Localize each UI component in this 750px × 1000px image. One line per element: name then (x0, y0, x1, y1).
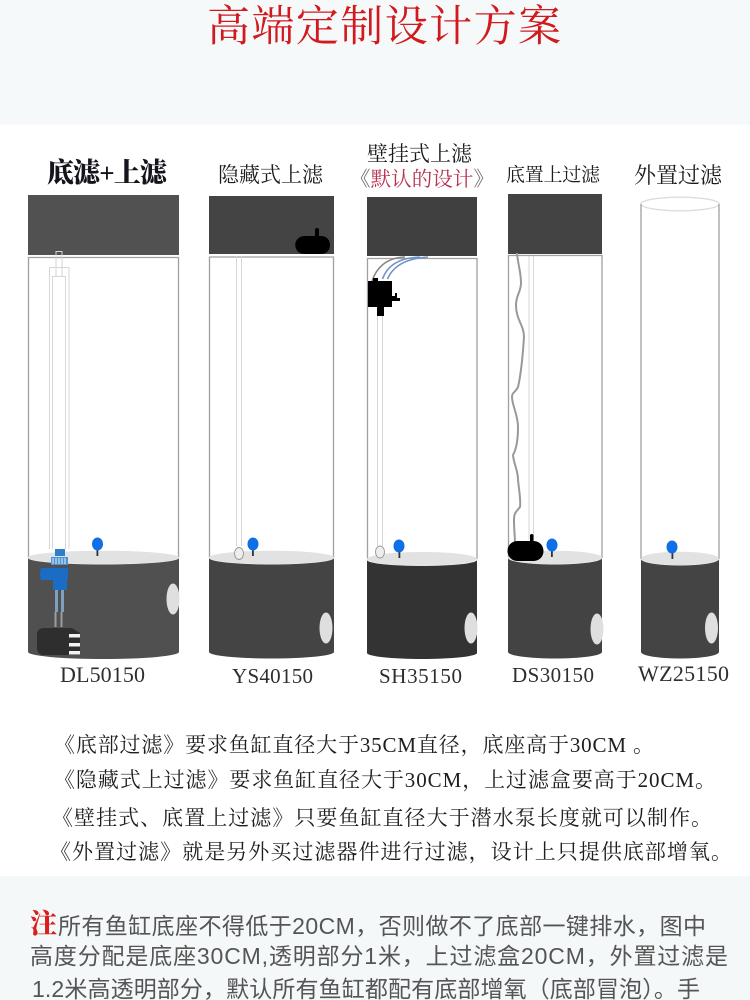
note line 2: 高度分配是底座30CM,透明部分1米，上过滤盒20CM，外置过滤是 (30, 943, 728, 969)
heading: bottom and top filter: 底滤+上滤 (47, 157, 170, 188)
drain port (705, 612, 718, 644)
drain port (166, 584, 180, 614)
base cylinder (28, 558, 179, 659)
return pipe (529, 256, 534, 540)
transparent tube walls (508, 256, 602, 558)
requirement: bottom filter: 《底部过滤》要求鱼缸直径大于35CM直径，底座高于30CM 。 (54, 733, 654, 758)
note marker: 注 (30, 909, 57, 939)
drain port (320, 612, 332, 644)
wavy power cord (512, 253, 524, 543)
header band (0, 0, 750, 124)
base floor ellipse (367, 552, 477, 566)
top filter box (28, 195, 179, 255)
hoses (372, 257, 428, 281)
air stone bubble (92, 538, 103, 556)
top filter box (508, 194, 602, 254)
base cylinder (508, 558, 602, 658)
note text (30, 909, 728, 1000)
requirement text block (50, 733, 732, 865)
requirement: hidden top filter: 《隐藏式上过滤》要求鱼缸直径大于30CM，上过滤盒要高于20CM。 (54, 768, 716, 793)
transparent tube walls (368, 258, 477, 559)
base floor ellipse (28, 551, 179, 564)
submersible pump (508, 534, 544, 561)
tank 5: WZ25150 (641, 197, 719, 658)
inner pipes (50, 252, 69, 549)
heading: wall-mounted top filter: 壁挂式上滤 (367, 142, 473, 166)
air stone bubble (546, 538, 558, 557)
tank 1: DL50150 (28, 195, 180, 659)
pump hoses (56, 612, 62, 627)
bottom pump (37, 628, 80, 655)
drain port (590, 614, 604, 644)
tank 3: SH35150 (367, 197, 478, 659)
note line 1: 所有鱼缸底座不得低于20CM，否则做不了底部一键排水，图中 (58, 913, 706, 939)
base cylinder (641, 559, 719, 658)
model label DL50150: DL50150 (60, 662, 145, 687)
requirement: wall and base mounted: 《壁挂式、底置上过滤》只要鱼缸直径大于潜水泵长度就可以制作。 (52, 806, 712, 830)
base cylinder (367, 560, 477, 659)
base floor ellipse (508, 551, 602, 564)
base floor ellipse (641, 552, 719, 565)
transparent tube walls (28, 258, 178, 558)
model label SH35150: SH35150 (379, 664, 462, 688)
model label WZ25150: WZ25150 (638, 661, 729, 686)
blue bulkhead fitting (40, 549, 68, 612)
heading: external filter: 外置过滤 (634, 163, 723, 188)
model label DS30150: DS30150 (512, 663, 594, 687)
return pipe (236, 256, 242, 546)
air stone bubble (666, 540, 678, 559)
title: 高端定制设计方案 (207, 3, 561, 51)
open top rim (641, 197, 719, 211)
drain port (464, 612, 478, 644)
top filter box (367, 197, 477, 256)
transparent tube walls (641, 204, 719, 559)
return pipe (378, 316, 382, 546)
top filter box (209, 196, 334, 254)
pipe end (376, 546, 384, 558)
heading: default design note: 《默认的设计》 (350, 168, 494, 191)
note band (0, 876, 750, 1000)
tank 2: YS40150 (209, 196, 334, 658)
base cylinder (209, 558, 334, 658)
air stone bubble (248, 538, 258, 556)
pipe end (234, 548, 244, 560)
wall-mounted pump (368, 278, 400, 316)
heading: base-mounted top filter: 底置上过滤 (506, 164, 601, 186)
submersible pump (295, 228, 330, 254)
base floor ellipse (209, 551, 334, 564)
air stone bubble (394, 540, 404, 558)
tank 4: DS30150 (508, 194, 604, 658)
transparent tube walls (210, 257, 334, 558)
heading: hidden top filter: 隐藏式上滤 (218, 163, 324, 187)
requirement: external filter: 《外置过滤》就是另外买过滤器件进行过滤，设计上只提供底部增氧。 (50, 840, 732, 865)
model label YS40150: YS40150 (232, 664, 313, 688)
